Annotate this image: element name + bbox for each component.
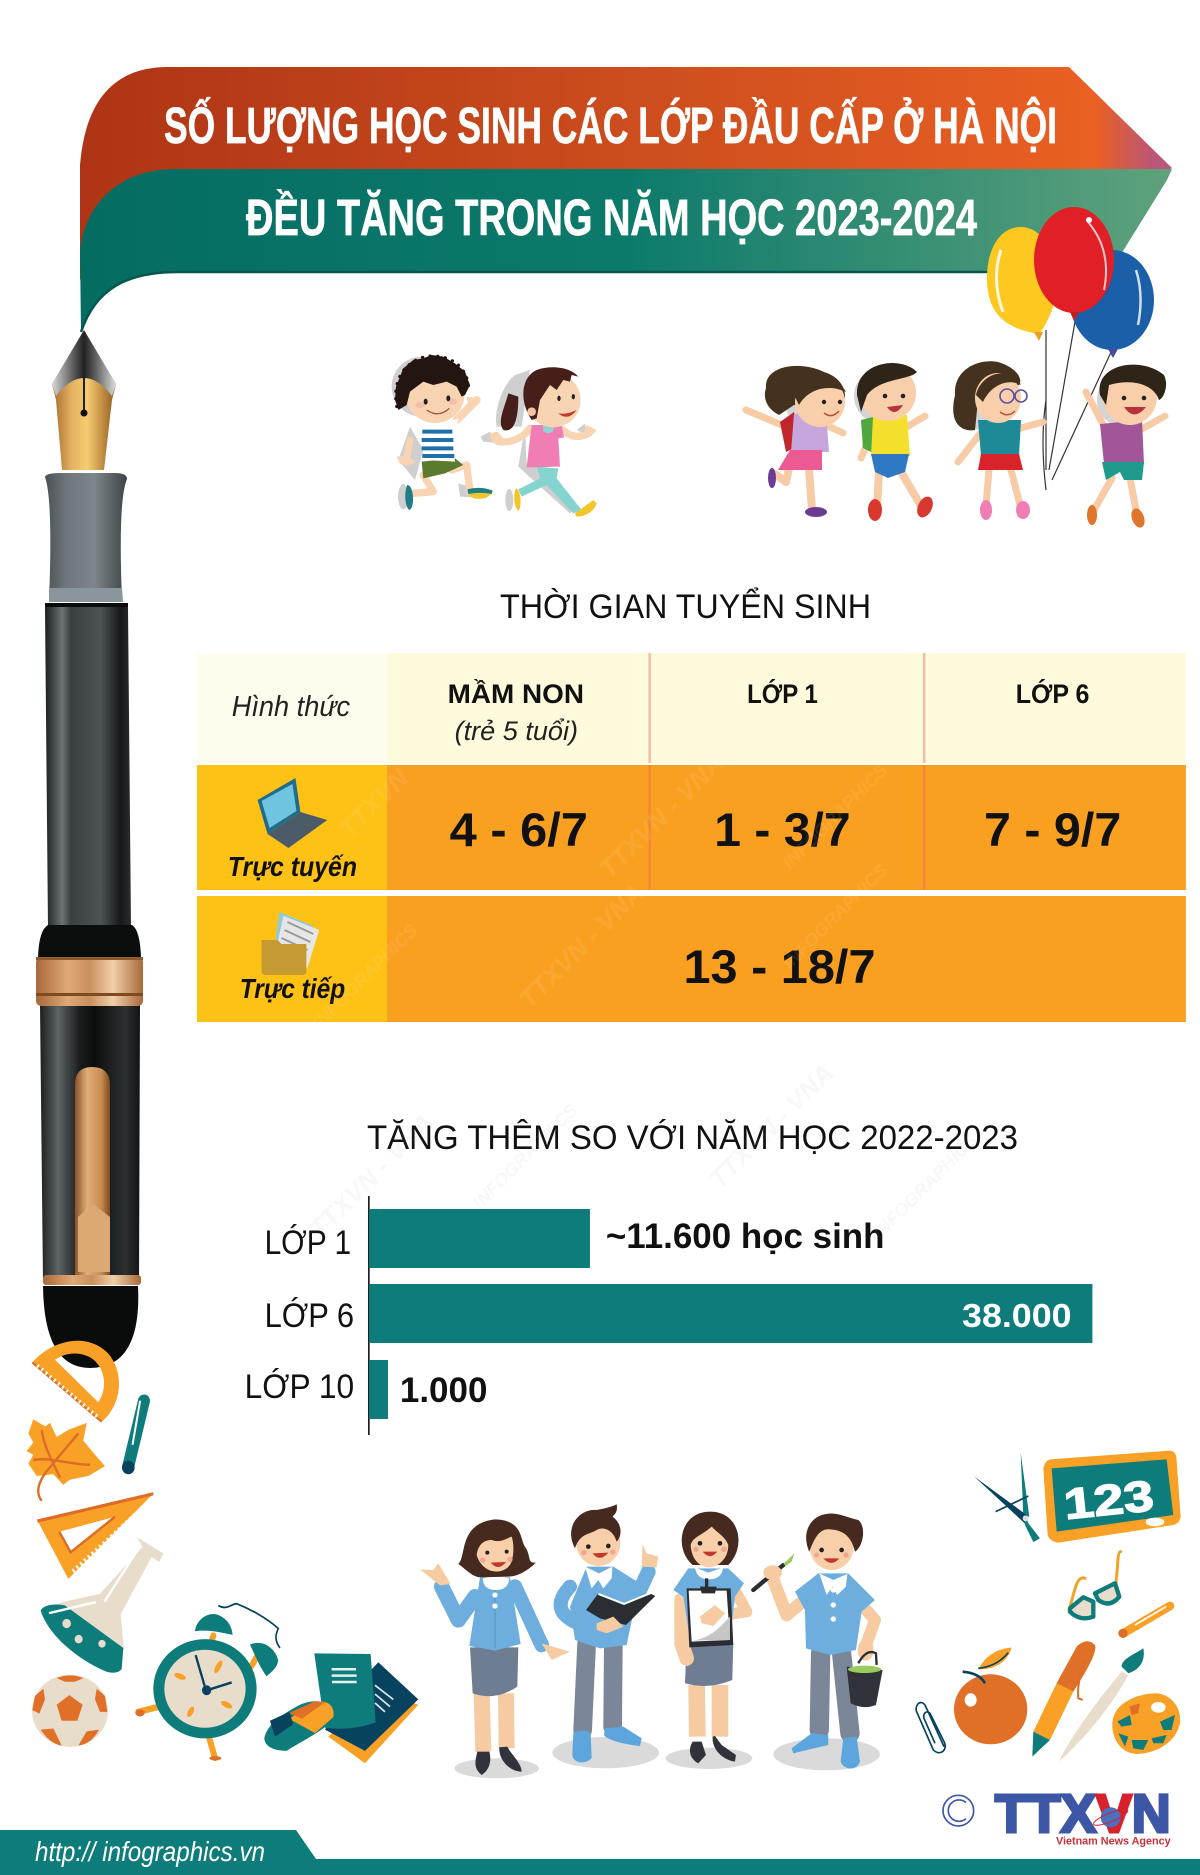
icon: paint brush bbox=[1059, 1648, 1144, 1762]
bar: grade 1 bbox=[265, 1209, 884, 1268]
watermarks on table: INFOGRAPHICS bbox=[779, 760, 891, 873]
watermarks: INFOGRAPHICS bbox=[869, 1130, 981, 1243]
icon: chalk bbox=[1118, 1606, 1170, 1638]
icon: compass bbox=[974, 1453, 1040, 1542]
teacher 3 bbox=[666, 1512, 752, 1769]
teacher 2 bbox=[552, 1504, 659, 1768]
watermarks on table: INFOGRAPHICS bbox=[779, 860, 891, 973]
balloons bbox=[987, 207, 1154, 490]
pen gold ring bbox=[36, 957, 143, 1006]
watermarks: TTXVN - VNA bbox=[703, 1058, 840, 1194]
kid: glasses bbox=[1000, 389, 1027, 403]
kid: girl with backpack bbox=[746, 366, 846, 517]
bar: grade 6: 38.000 bbox=[962, 1297, 1072, 1334]
logo: TTXVN bbox=[943, 1785, 1172, 1848]
banner: orange ribbon bbox=[80, 67, 1172, 280]
watermarks: TTXVN - VNA bbox=[303, 1108, 440, 1244]
table row: in person: 13 - 18/7 bbox=[683, 941, 876, 993]
watermarks on table bbox=[309, 748, 891, 1033]
icon: set square bbox=[37, 1494, 153, 1579]
table header row bbox=[197, 653, 1186, 763]
table header row: LỚP 6 bbox=[1016, 678, 1089, 709]
balloon: red bbox=[1034, 207, 1114, 321]
teacher 4 bbox=[753, 1513, 883, 1770]
icon: paperclip bbox=[916, 1703, 945, 1753]
table row: online: 4 - 6/7 bbox=[450, 804, 588, 856]
kid: boy striped shirt bbox=[392, 355, 493, 510]
watermarks on table: TTXVN - VNA bbox=[513, 878, 650, 1014]
school items: right column bbox=[916, 1451, 1181, 1762]
teacher 2 book bbox=[586, 1593, 655, 1625]
table row: in person bbox=[197, 896, 1186, 1022]
agency name: TTXVN bbox=[995, 1785, 1171, 1844]
watermarks: INFOGRAPHICS bbox=[469, 1100, 581, 1213]
balloon: blue bbox=[1070, 250, 1154, 358]
icon: chalkboard: 123 bbox=[1061, 1472, 1156, 1529]
bar chart: student increase bbox=[245, 1196, 1092, 1435]
kid: girl with glasses bbox=[953, 361, 1043, 520]
globe emblem bbox=[1092, 1806, 1129, 1828]
table row: online: 1 - 3/7 bbox=[714, 804, 851, 856]
bar: grade 6 bbox=[265, 1284, 1092, 1343]
bar: grade 10: LỚP 10 bbox=[245, 1368, 354, 1406]
icon: flask bbox=[41, 1537, 163, 1673]
title banner bbox=[80, 67, 1172, 332]
teacher 3 clipboard bbox=[687, 1588, 733, 1647]
pen ink window bbox=[75, 1067, 110, 1276]
table header row: MẦM NON bbox=[448, 678, 584, 709]
icon: folder bbox=[262, 912, 319, 975]
icon: pen bbox=[1032, 1641, 1095, 1757]
bar: grade 1: ~11.600 học sinh bbox=[606, 1217, 884, 1256]
title line 2: ĐỀU TĂNG TRONG NĂM HỌC 2023-2024 bbox=[246, 188, 977, 246]
icon: fountain pen bbox=[36, 330, 143, 1368]
footer bar bbox=[0, 1830, 1200, 1875]
bar: grade 10: 1.000 bbox=[400, 1371, 487, 1410]
watermarks on table: INFOGRAPHICS bbox=[309, 920, 421, 1033]
icon: teal pencil bbox=[122, 1401, 144, 1474]
school items: left column bbox=[27, 1341, 418, 1763]
icon: books and eraser bbox=[264, 1653, 418, 1763]
bar: grade 1: LỚP 1 bbox=[265, 1224, 351, 1262]
icon: football bbox=[32, 1675, 108, 1747]
icon: glasses bbox=[1070, 1552, 1121, 1618]
icon: protractor bbox=[32, 1341, 119, 1422]
table row: online: Trực tuyến bbox=[228, 851, 357, 882]
table row: online bbox=[197, 765, 1186, 890]
teacher 1 bbox=[420, 1519, 570, 1778]
table header row: Hình thức bbox=[232, 691, 351, 723]
heading: admission time: THỜI GIAN TUYỂN SINH bbox=[500, 588, 871, 626]
banner: green ribbon bbox=[80, 169, 1172, 332]
icon: alarm clock bbox=[135, 1604, 280, 1760]
kid: boy yellow shirt bbox=[854, 363, 936, 521]
watermarks on table: TTXVN - VNA bbox=[593, 748, 730, 884]
table header row: LỚP 1 bbox=[747, 678, 818, 709]
balloon: yellow bbox=[987, 227, 1057, 341]
footer URL: http:// infographics.vn bbox=[35, 1836, 265, 1867]
table: admission schedule bbox=[197, 653, 1186, 1022]
icon: apple bbox=[954, 1648, 1027, 1744]
icon: laptop bbox=[258, 778, 327, 848]
watermarks bbox=[303, 1058, 981, 1244]
icon: palette bbox=[1112, 1693, 1180, 1754]
watermarks on table: TTXVN bbox=[333, 762, 415, 844]
icon: maple leaf bbox=[27, 1419, 105, 1501]
kid: girl pink shirt bbox=[481, 367, 597, 517]
bar: grade 10 bbox=[245, 1360, 487, 1419]
agency tagline: Vietnam News Agency bbox=[1056, 1836, 1172, 1848]
icon: chalkboard bbox=[1043, 1451, 1181, 1543]
heading: increase compared to last year: TĂNG THÊM SO VỚI NĂM HỌC 2022-2023 bbox=[367, 1119, 1018, 1157]
table header row: (trẻ 5 tuổi) bbox=[455, 716, 578, 746]
bar: grade 6: LỚP 6 bbox=[265, 1297, 354, 1335]
table row: in person: Trực tiếp bbox=[240, 973, 345, 1004]
table row: online: 7 - 9/7 bbox=[984, 804, 1121, 856]
kid: boy purple shirt bbox=[1086, 365, 1166, 529]
copyright symbol bbox=[943, 1795, 974, 1826]
teachers group bbox=[420, 1504, 883, 1778]
teacher 4 paint brush bbox=[753, 1565, 783, 1590]
teacher 4 bucket bbox=[858, 1652, 877, 1665]
